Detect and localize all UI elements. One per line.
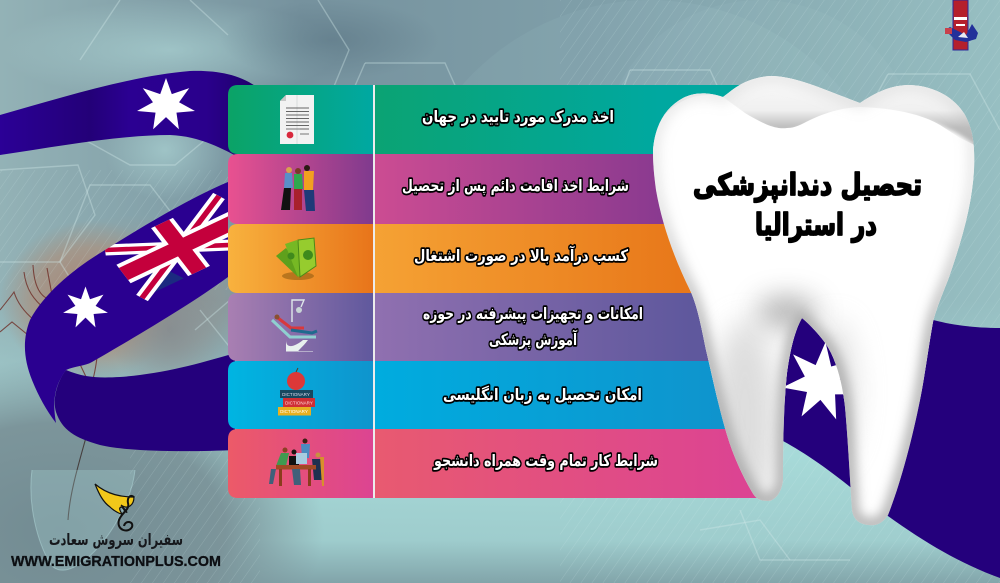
text: row 2: شرایط اخذ اقامت دائم پس از تحصیل — [402, 176, 629, 196]
icon: document — [280, 95, 314, 144]
text: row 6: شرایط کار تمام وقت همراه دانشجو — [433, 451, 658, 470]
icon: team at table — [269, 438, 324, 486]
icon: star right — [780, 339, 864, 421]
logo wordmark: سفیران سروش سعادت — [49, 530, 183, 549]
logo: emblem top-right — [945, 0, 978, 50]
ribbon: front band with flag and star — [24, 182, 228, 423]
icon: apple on dictionaries: DICTIONARY — [285, 400, 313, 406]
logo url: WWW.EMIGRATIONPLUS.COM — [11, 553, 221, 570]
text: row 4: آموزش پزشکی — [489, 329, 577, 350]
text: row 5: امکان تحصیل به زبان انگلیسی — [443, 385, 642, 404]
panel: benefits list — [228, 85, 770, 498]
icon: dental chair — [272, 300, 317, 352]
row 5: english instruction — [228, 361, 770, 429]
row 3: high income — [228, 224, 770, 293]
icon: apple on dictionaries: DICTIONARY — [282, 392, 310, 397]
text: row 4 — [423, 304, 643, 350]
icon: star on flag band — [63, 286, 108, 327]
ribbon: top band with star — [0, 71, 258, 158]
row 6: full-time work — [228, 429, 770, 498]
title: در استرالیا — [755, 208, 877, 243]
title: تحصیل دندانپزشکی — [693, 168, 922, 203]
text: row 1: اخذ مدرک مورد تایید در جهان — [422, 107, 614, 126]
title — [693, 168, 922, 243]
row 4: advanced equipment — [228, 293, 770, 361]
icon: three students — [281, 165, 315, 211]
text: row 3: کسب درآمد بالا در صورت اشتغال — [414, 245, 629, 265]
icon: union jack — [105, 192, 228, 302]
icon: star top — [137, 78, 195, 129]
row 2: permanent residency — [228, 154, 770, 224]
logo: company bottom-left — [11, 484, 221, 570]
row 1: recognised degree — [228, 85, 770, 154]
tooth — [640, 70, 985, 530]
text: row 4: امکانات و تجهیزات پیشرفته در حوزه — [423, 304, 643, 324]
icon: winged bird — [95, 484, 134, 531]
icon: apple on dictionaries — [278, 368, 315, 416]
ribbon: dark back fold — [55, 353, 235, 451]
ribbon: right band with star behind tooth — [770, 290, 1000, 578]
icon: banknotes — [276, 238, 316, 280]
icon: apple on dictionaries: DICTIONARY — [280, 409, 308, 414]
divider line — [373, 85, 375, 498]
